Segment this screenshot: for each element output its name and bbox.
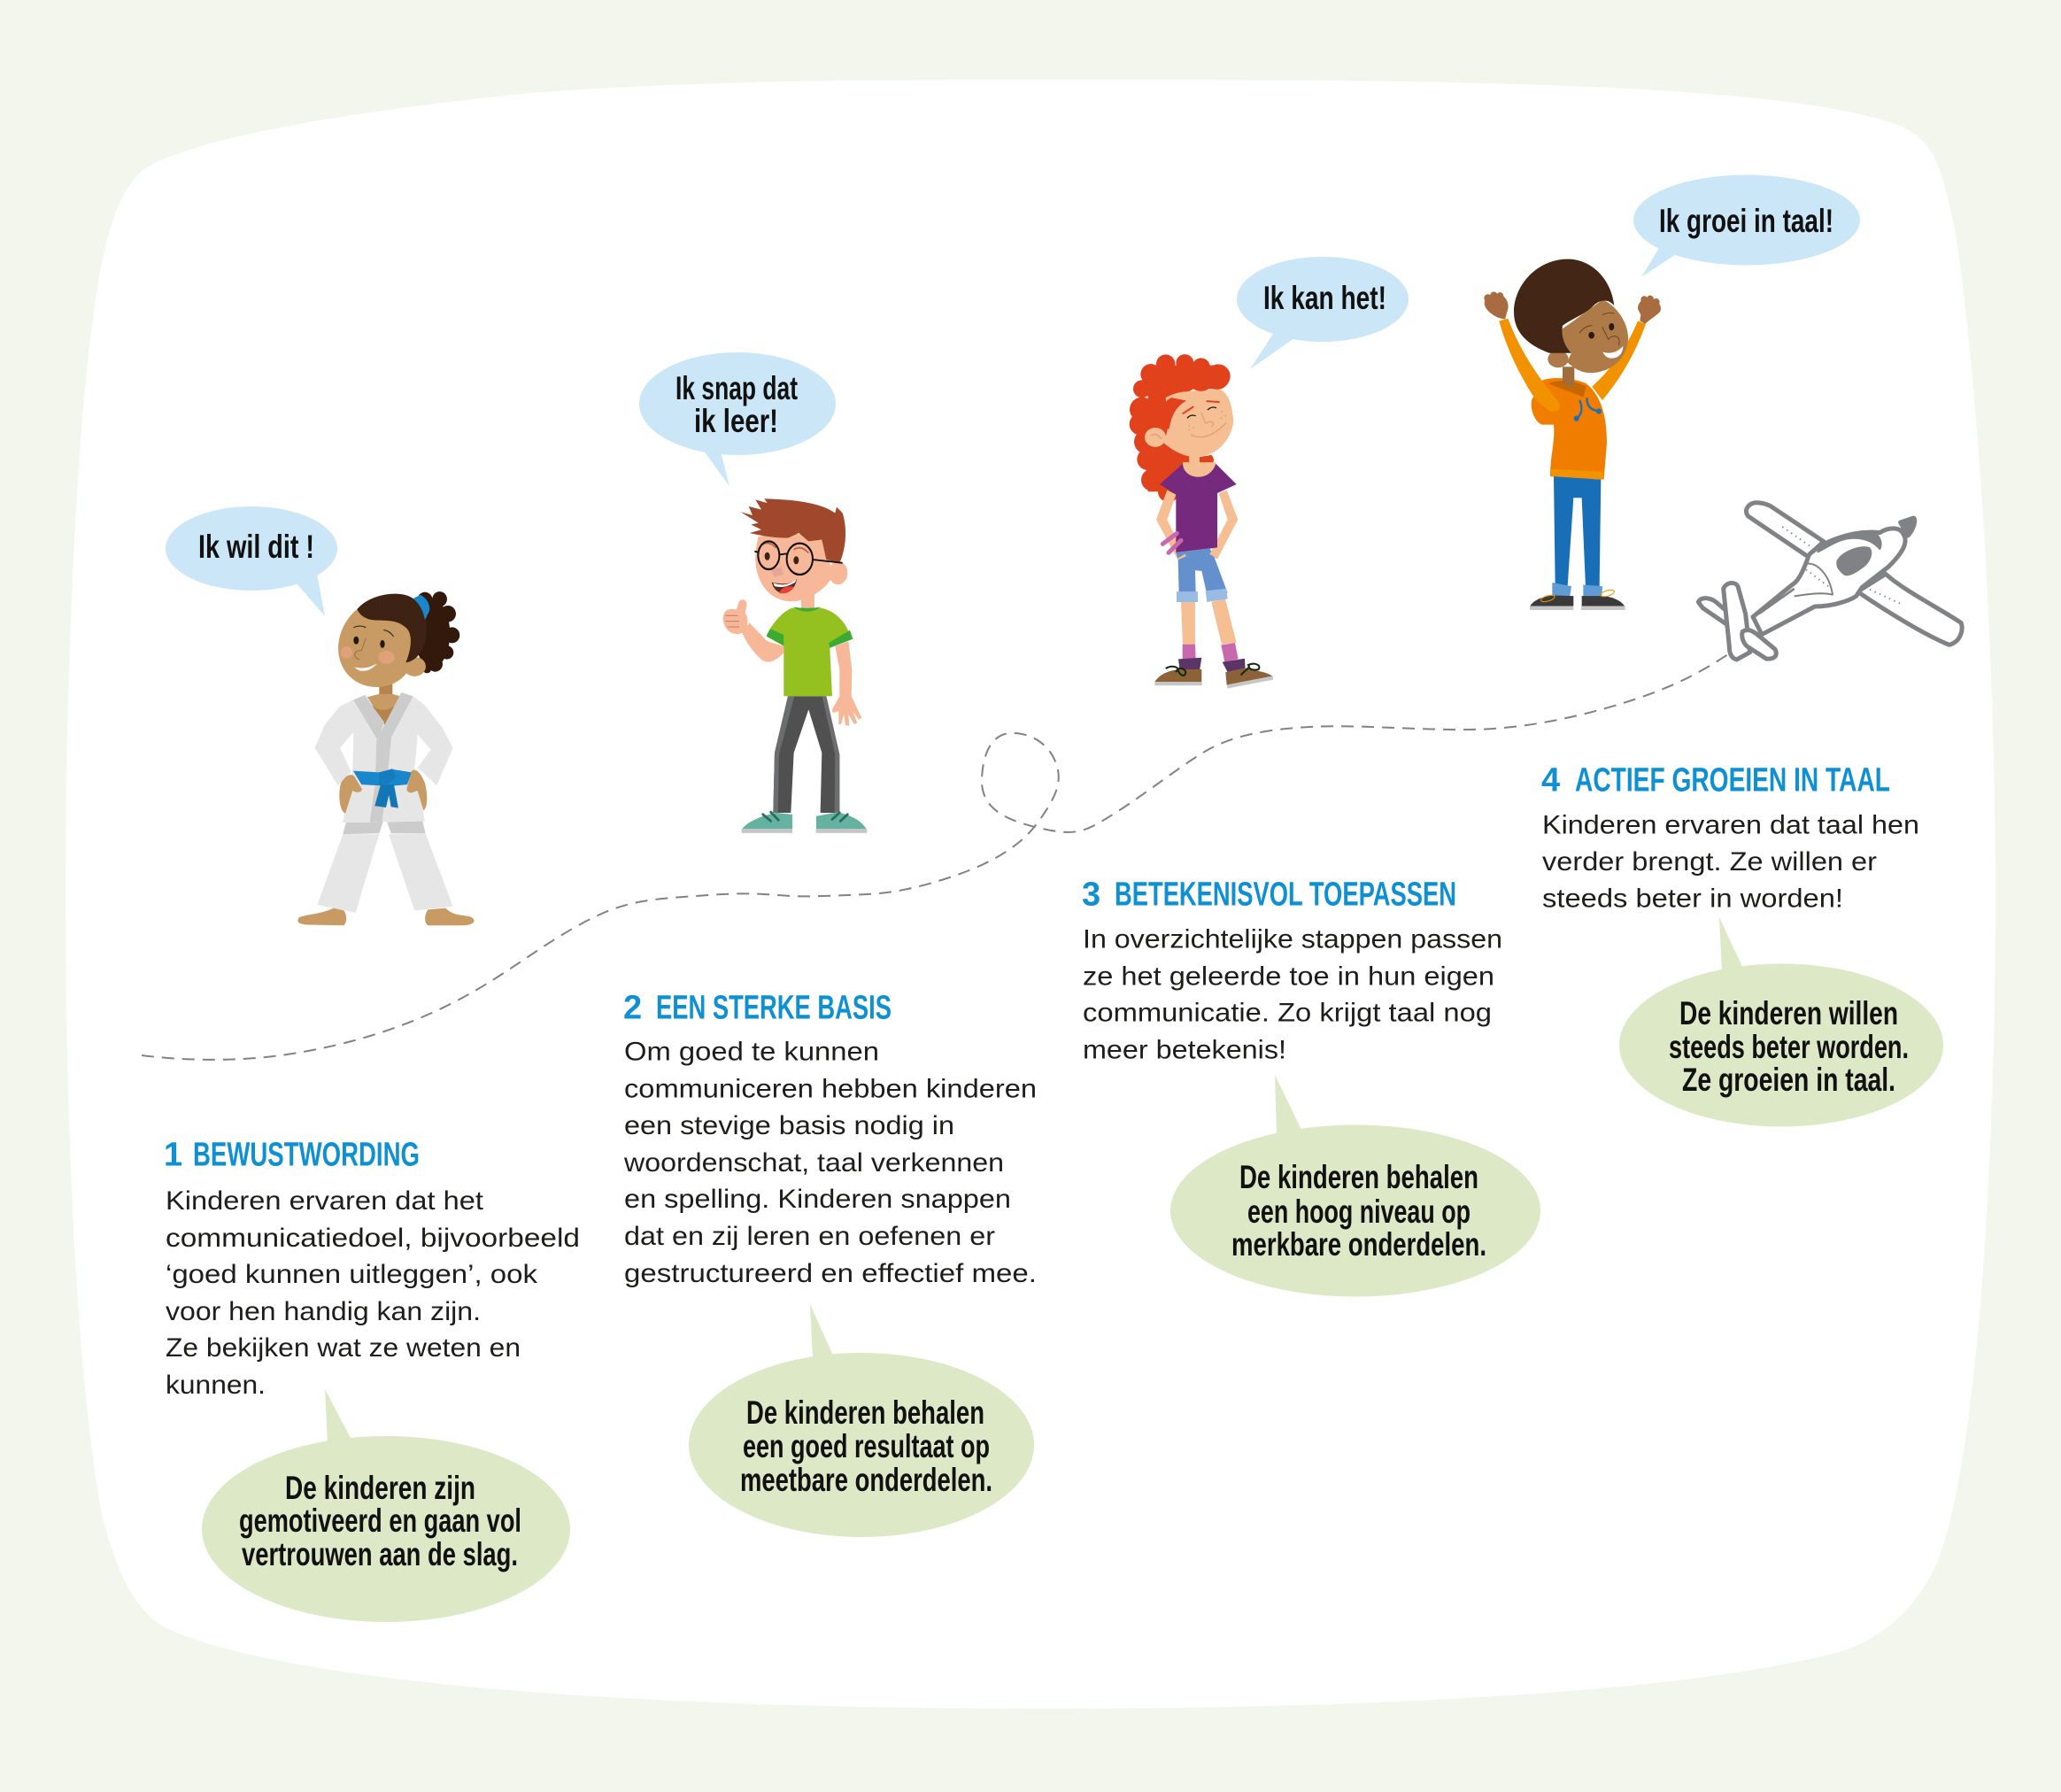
step 2 text block: een stevige basis nodig in	[624, 1111, 954, 1140]
step 1 callout: De kinderen zijn	[285, 1470, 475, 1506]
step 3 callout: De kinderen behalen	[1239, 1159, 1478, 1195]
speech bubble: Ik kan het	[1237, 257, 1409, 369]
step 2 text block: dat en zij leren en oefenen er	[624, 1222, 995, 1251]
step 2 text block: en spelling. Kinderen snappen	[624, 1185, 1011, 1214]
step 1 callout: gemotiveerd en gaan vol	[239, 1502, 521, 1539]
step 1 text block: communicatiedoel, bijvoorbeeld	[166, 1224, 580, 1253]
speech bubble: Ik groei in taal: Ik groei in taal!	[1659, 203, 1833, 239]
step 2 text block: 2	[623, 990, 642, 1027]
step 3 text block	[1082, 877, 1502, 1064]
step 2 callout: De kinderen behalen	[746, 1394, 984, 1431]
speech bubble: Ik kan het: Ik kan het!	[1263, 280, 1386, 316]
step 4 callout: steeds beter worden.	[1669, 1029, 1909, 1065]
speech bubble: Ik wil dit: Ik wil dit !	[198, 529, 314, 565]
step 4 text block: ACTIEF GROEIEN IN TAAL	[1575, 761, 1890, 799]
step 1 text block: BEWUSTWORDING	[193, 1137, 420, 1174]
dashed flight path	[142, 654, 1728, 1060]
character: boy with glasses	[723, 498, 867, 833]
step 3 callout	[1170, 1075, 1540, 1296]
step 1 text block: kunnen.	[166, 1371, 266, 1400]
step 2 text block	[623, 990, 1037, 1288]
step 1 callout: vertrouwen aan de slag.	[242, 1536, 518, 1572]
character: boy with arms raised	[1484, 259, 1661, 610]
step 1 callout	[202, 1389, 570, 1622]
step 4 callout: De kinderen willen	[1679, 995, 1898, 1031]
speech bubble: Ik groei in taal	[1633, 175, 1860, 277]
step 4 text block: 4	[1541, 761, 1560, 799]
step 1 text block: Kinderen ervaren dat het	[166, 1186, 484, 1216]
character: girl with red curls	[1130, 354, 1273, 689]
character: girl in judo suit	[297, 591, 475, 925]
step 1 text block: ‘goed kunnen uitleggen’, ook	[166, 1260, 538, 1289]
step 2 text block: EEN STERKE BASIS	[656, 990, 892, 1027]
speech bubble: Ik snap dat ik leer: ik leer!	[694, 403, 778, 439]
step 3 callout: een hoog niveau op	[1247, 1193, 1470, 1230]
step 2 text block: communiceren hebben kinderen	[624, 1075, 1037, 1103]
step 2 callout: een goed resultaat op	[743, 1428, 990, 1464]
step 3 callout: merkbare onderdelen.	[1231, 1226, 1486, 1263]
step 2 text block: gestructureerd en effectief mee.	[624, 1259, 1037, 1288]
step 4 callout	[1619, 917, 1943, 1126]
step 3 text block: communicatie. Zo krijgt taal nog	[1083, 999, 1492, 1027]
step 1 text block: Ze bekijken wat ze weten en	[166, 1333, 521, 1363]
step 4 text block: verder brengt. Ze willen er	[1542, 847, 1877, 877]
step 2 callout: meetbare onderdelen.	[740, 1462, 992, 1498]
step 2 text block: woordenschat, taal verkennen	[623, 1148, 1004, 1178]
step 4 text block: steeds beter in worden!	[1542, 884, 1843, 914]
step 3 text block: ze het geleerde toe in hun eigen	[1083, 962, 1494, 992]
speech bubble: Ik snap dat ik leer	[639, 352, 836, 486]
step 3 text block: In overzichtelijke stappen passen	[1083, 924, 1502, 954]
step 4 text block: Kinderen ervaren dat taal hen	[1542, 811, 1919, 839]
step 4 text block	[1541, 761, 1919, 914]
step 3 text block: BETEKENISVOL TOEPASSEN	[1115, 877, 1456, 914]
step 1 text block: voor hen handig kan zijn.	[166, 1297, 481, 1326]
step 1 text block: 1	[164, 1137, 182, 1174]
step 1 text block	[164, 1137, 580, 1400]
step 2 text block: Om goed te kunnen	[624, 1038, 879, 1066]
step 4 callout: Ze groeien in taal.	[1682, 1062, 1895, 1098]
speech bubble: Ik snap dat ik leer: Ik snap dat	[675, 370, 798, 406]
speech bubble: Ik wil dit	[166, 506, 337, 616]
step 3 text block: 3	[1082, 877, 1100, 914]
step 2 callout	[689, 1304, 1034, 1537]
icon: airplane	[1698, 503, 1962, 660]
step 3 text block: meer betekenis!	[1083, 1036, 1286, 1064]
